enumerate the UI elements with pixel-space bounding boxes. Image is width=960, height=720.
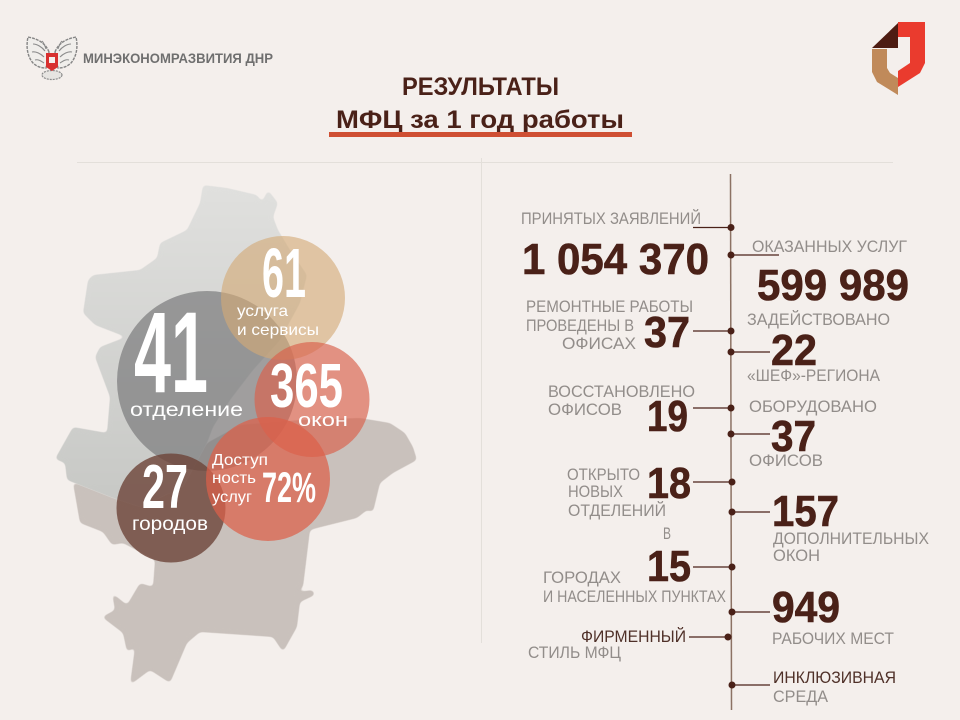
stat: inclusive environment xyxy=(728,669,896,706)
stat: services rendered: ОКАЗАННЫХ УСЛУГ xyxy=(752,238,907,256)
stat: equipped offices: 37 xyxy=(771,412,816,461)
bubble: 27 cities: городов xyxy=(132,514,208,535)
stat: restored offices xyxy=(548,383,734,441)
stat: corporate style: СТИЛЬ МФЦ xyxy=(528,644,621,662)
bubble: 365 windows: 365 xyxy=(270,352,343,421)
bubble: 41 branches: отделение xyxy=(130,400,243,421)
stat: restored offices: ОФИСОВ xyxy=(548,401,622,419)
stat: applications received: 1 054 370 xyxy=(522,235,709,284)
bubble: 27 cities xyxy=(116,453,226,562)
bubble: 72% availability: Доступ xyxy=(212,452,268,469)
stat: services rendered xyxy=(728,238,909,310)
stat: restored offices: ВОССТАНОВЛЕНО xyxy=(548,383,695,401)
title: РЕЗУЛЬТАТЫ xyxy=(402,73,559,101)
bubble: 72% availability xyxy=(206,417,330,541)
icon: coat of arms xyxy=(27,37,77,80)
stat: cities and settlements: В xyxy=(663,525,671,543)
bubble: 61 services: и сервисы xyxy=(237,322,319,339)
map: lower region xyxy=(67,418,417,685)
bubble: 41 branches: 41 xyxy=(134,289,208,417)
stat: repairs: РЕМОНТНЫЕ РАБОТЫ xyxy=(526,298,693,316)
stat: extra windows: ДОПОЛНИТЕЛЬНЫХ xyxy=(773,530,929,548)
timeline xyxy=(521,174,929,710)
stat: services rendered: 599 989 xyxy=(757,261,909,310)
stat: repairs xyxy=(526,298,734,357)
stat: extra windows xyxy=(728,487,929,565)
bubble: 61 services xyxy=(221,234,345,360)
stat: repairs: 37 xyxy=(644,308,690,357)
stat: repairs: ПРОВЕДЕНЫ В xyxy=(526,317,634,335)
stat: inclusive environment: ИНКЛЮЗИВНАЯ xyxy=(773,669,896,687)
ministry name: МИНЭКОНОМРАЗВИТИЯ ДНР xyxy=(83,51,273,66)
stat: corporate style: ФИРМЕННЫЙ xyxy=(581,627,686,646)
timeline axis xyxy=(730,174,732,710)
stat: jobs: 949 xyxy=(772,583,840,632)
bubble: 61 services: 61 xyxy=(262,234,306,312)
stat: cities and settlements xyxy=(543,525,736,606)
stat: inclusive environment: СРЕДА xyxy=(773,688,828,706)
bubble: 27 cities: 27 xyxy=(142,453,188,522)
title xyxy=(329,73,632,137)
stat: cities and settlements: ГОРОДАХ xyxy=(543,569,621,587)
stat: applications received: ПРИНЯТЫХ ЗАЯВЛЕНИЙ xyxy=(521,209,701,228)
stat: restored offices: 19 xyxy=(647,392,688,441)
bubble: 72% availability: 72% xyxy=(262,464,316,512)
logo: MFC shield xyxy=(872,22,925,95)
stat: extra windows: ОКОН xyxy=(773,547,820,565)
stat: new branches: ОТДЕЛЕНИЙ xyxy=(568,501,666,520)
stat: repairs: ОФИСАХ xyxy=(562,335,636,353)
bubble: 61 services: услуга xyxy=(237,303,288,320)
stat: sponsor regions: 22 xyxy=(771,326,817,375)
bubble: 72% availability: услуг xyxy=(212,489,252,506)
bubble: 72% availability: ность xyxy=(212,470,256,487)
bubble: 41 branches xyxy=(117,289,297,471)
map of the region xyxy=(55,185,417,685)
stat: sponsor regions xyxy=(728,310,890,385)
logo: Minekonomrazvitiya DNR xyxy=(27,37,273,80)
stat: equipped offices xyxy=(728,398,877,470)
stat: corporate style xyxy=(528,627,732,662)
stat: equipped offices: ОБОРУДОВАНО xyxy=(749,398,877,416)
stat: new branches: НОВЫХ xyxy=(568,483,623,501)
stat: equipped offices: ОФИСОВ xyxy=(749,452,823,470)
stat: extra windows: 157 xyxy=(772,487,839,536)
stat: applications received xyxy=(521,209,734,284)
stat: cities and settlements: 15 xyxy=(647,542,691,591)
stat: sponsor regions: «ШЕФ»-РЕГИОНА xyxy=(747,367,880,385)
stat: new branches: 18 xyxy=(647,459,691,508)
stat: new branches: ОТКРЫТО xyxy=(567,466,640,484)
stat: jobs xyxy=(728,583,894,648)
stat: cities and settlements: И НАСЕЛЕННЫХ ПУНКТАХ xyxy=(543,588,726,606)
map: upper region xyxy=(55,185,307,507)
stat: new branches xyxy=(567,459,736,520)
bubbles xyxy=(116,234,370,562)
stat: jobs: РАБОЧИХ МЕСТ xyxy=(772,630,894,648)
bubble: 365 windows: окон xyxy=(298,410,348,430)
stat: sponsor regions: ЗАДЕЙСТВОВАНО xyxy=(747,310,890,329)
bubble: 365 windows xyxy=(254,342,370,457)
title: МФЦ за 1 год работы xyxy=(336,106,624,134)
